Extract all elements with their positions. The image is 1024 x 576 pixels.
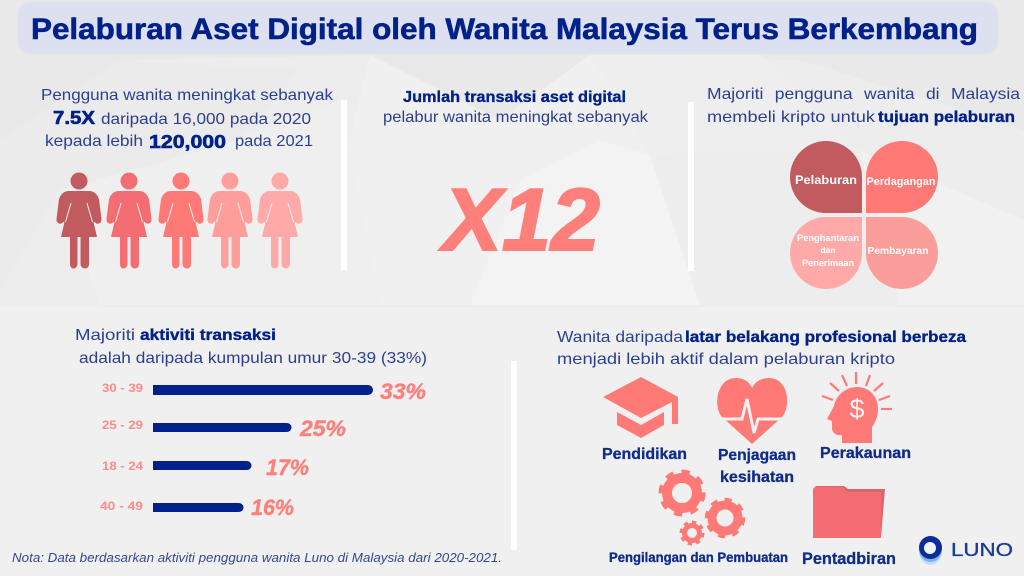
bar chart: age groups: 18 - 24 — [102, 461, 144, 473]
label: Pengilangan dan Pembuatan: Pengilangan dan Pembuatan — [609, 550, 788, 565]
panel: women users growth — [41, 87, 334, 268]
icon: head with dollar: $ — [849, 394, 865, 424]
panel: transaction multiplier — [383, 89, 649, 269]
text block: transaction count — [383, 89, 649, 126]
bar chart: age groups: 17% — [266, 455, 309, 480]
text block: transaction count: Jumlah transaksi aset digital — [403, 89, 626, 106]
chart: four petals: Penerimaan — [802, 258, 854, 268]
text block: user growth: Pengguna wanita meningkat sebanyak — [41, 87, 334, 104]
panel: age groups — [75, 327, 427, 520]
chart: four petals: Perdagangan — [866, 176, 936, 188]
title banner — [18, 2, 998, 54]
text block: majority purpose: tujuan pelaburan — [878, 109, 1015, 126]
icon: row of five women — [56, 172, 303, 268]
title banner: Pelaburan Aset Digital oleh Wanita Malaysia Terus Berkembang — [31, 13, 978, 46]
bar chart: age groups: 16% — [251, 495, 294, 520]
bar chart: age groups: 30 - 39 — [102, 383, 143, 395]
logo: Luno: LUNO — [951, 540, 1013, 560]
chart: four petals: Pelaburan — [795, 173, 857, 187]
text block: majority purpose — [707, 86, 1020, 126]
bar chart: age groups: 33% — [380, 379, 426, 404]
text block: age heading: Majoriti — [75, 327, 135, 344]
bar chart: age groups: 25% — [299, 416, 346, 441]
label: Perakaunan: Perakaunan — [820, 445, 911, 462]
icon: folder — [813, 486, 885, 538]
icon: graduation cap — [603, 377, 678, 438]
label: Penjagaan kesihatan: Penjagaan — [718, 447, 796, 464]
text block: transaction count: pelabur wanita meningkat sebanyak — [383, 109, 649, 126]
icon: heart with pulse — [717, 378, 790, 444]
bar chart: age groups: 25 - 29 — [102, 420, 143, 432]
text block: user growth: 7.5X — [53, 108, 95, 128]
text block: professions heading: latar belakang profesional berbeza — [685, 329, 966, 346]
text block: professions heading — [557, 329, 966, 368]
label: Penjagaan kesihatan: kesihatan — [720, 469, 794, 486]
text block: professions heading: menjadi lebih aktif dalam pelaburan kripto — [557, 351, 895, 368]
chart: four petals — [790, 141, 938, 289]
text block: majority purpose: membeli kripto untuk — [707, 109, 876, 126]
chart: four petals: Penghantaran — [797, 233, 859, 243]
text block: user growth: daripada 16,000 pada 2020 — [101, 111, 311, 128]
label: Pentadbiran: Pentadbiran — [802, 549, 896, 568]
big number X12: X12 — [438, 170, 600, 269]
chart: four petals: Pembayaran — [868, 245, 928, 257]
logo: Luno — [919, 536, 1013, 565]
label: Pendidikan: Pendidikan — [602, 446, 687, 463]
chart: four petals: dan — [820, 245, 836, 255]
text block: user growth: kepada lebih — [45, 133, 143, 150]
text block: majority purpose: Majoriti pengguna wanita di Malaysia — [707, 86, 1020, 103]
text block: age heading: aktiviti transaksi — [140, 327, 276, 344]
text block: age heading: adalah daripada kumpulan umur 30-39 (33%) — [79, 350, 427, 367]
text block: user growth: pada 2021 — [235, 133, 313, 150]
bar chart: age groups — [100, 379, 426, 520]
icon: gears — [661, 472, 743, 544]
bar chart: age groups: 40 - 49 — [100, 501, 143, 513]
label: Penjagaan kesihatan — [718, 447, 796, 486]
panel: professional backgrounds — [557, 329, 966, 568]
panel: purchase purposes — [707, 86, 1020, 289]
text block: user growth — [41, 87, 334, 152]
footnote: Nota: Data berdasarkan aktiviti pengguna wanita Luno di Malaysia dari 2020-2021. — [12, 550, 502, 565]
icon: head with dollar — [822, 372, 892, 443]
text block: user growth: 120,000 — [149, 132, 226, 152]
text block: professions heading: Wanita daripada — [557, 329, 683, 346]
text block: age heading — [75, 327, 427, 367]
